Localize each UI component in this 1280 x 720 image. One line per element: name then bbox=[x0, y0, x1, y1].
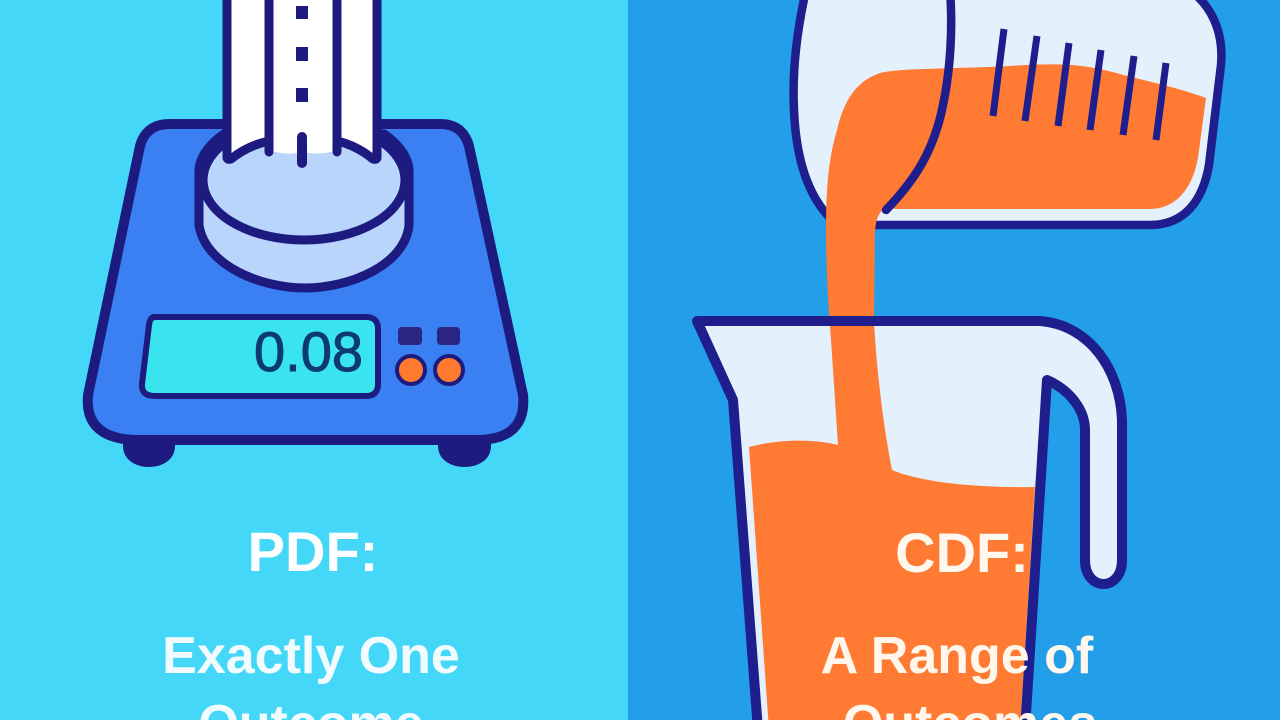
weighing pan bbox=[199, 120, 409, 288]
heading: PDF: PDF: bbox=[248, 520, 378, 583]
beaker liquid bbox=[826, 64, 1206, 235]
beaker rim bbox=[886, 0, 951, 210]
text: Exactly One Outcome: Exactly One bbox=[162, 627, 460, 685]
scale foot right bbox=[438, 440, 491, 467]
text: A Range of Outcomes: A Range of bbox=[821, 627, 1094, 685]
beaker body bbox=[794, 0, 1221, 225]
measurement ticks bbox=[993, 29, 1166, 140]
scale foot left bbox=[123, 440, 175, 467]
icon: digital scale bbox=[88, 0, 523, 467]
panel: PDF bbox=[0, 0, 628, 720]
display screen bbox=[142, 317, 378, 396]
column tick marks bbox=[296, 6, 308, 168]
control buttons bbox=[397, 327, 463, 384]
jug outline bbox=[697, 321, 1122, 720]
display reading: 0.08 bbox=[254, 320, 363, 383]
scale base bbox=[88, 124, 523, 440]
heading: CDF: CDF: bbox=[895, 521, 1029, 584]
poured stream and jug liquid bbox=[749, 225, 1035, 720]
icon: measuring jug bbox=[697, 225, 1122, 720]
jug body bbox=[697, 321, 1122, 720]
icon: pouring beaker bbox=[794, 0, 1221, 235]
panel: CDF bbox=[628, 0, 1280, 720]
test tube column bbox=[227, 0, 377, 168]
